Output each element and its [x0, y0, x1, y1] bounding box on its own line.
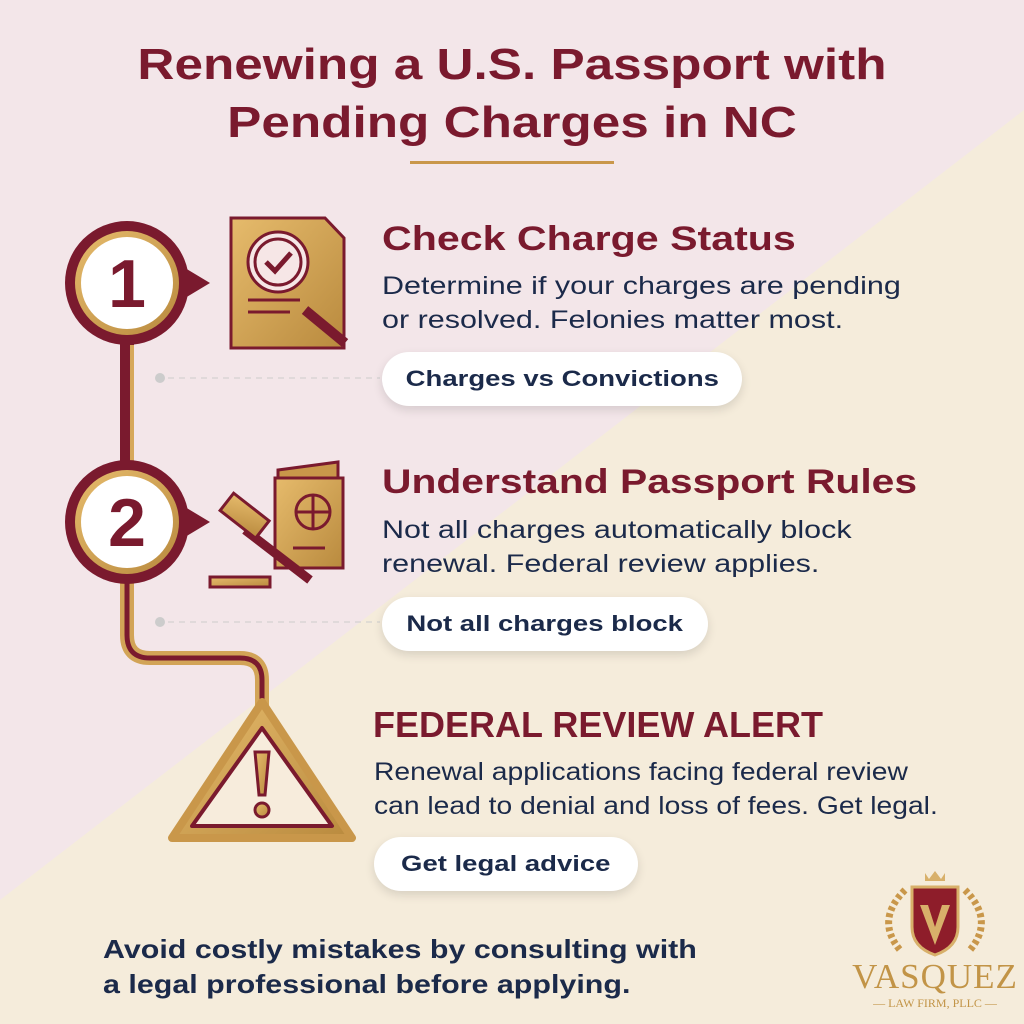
- logo: VASQUEZ: [852, 957, 1018, 996]
- step 2 heading: Understand Passport Rules: [382, 463, 917, 501]
- icon: warning triangle: [172, 702, 352, 838]
- step 2 number: [65, 460, 210, 584]
- step 2 pill: Not all charges block: [407, 611, 683, 636]
- step 1 body: or resolved. Felonies matter most.: [382, 306, 843, 334]
- title: Renewing a U.S. Passport with: [137, 40, 887, 89]
- footer text: [103, 934, 697, 999]
- step 1 pill: [382, 352, 742, 406]
- step 2 pill: [382, 597, 708, 651]
- timeline path and markers: [65, 216, 380, 842]
- step 1 heading: Check Charge Status: [382, 220, 796, 258]
- logo: [852, 871, 1018, 1010]
- footer text: Avoid costly mistakes by consulting with: [103, 934, 697, 964]
- step 1 number: [65, 221, 210, 345]
- step 3 pill: [374, 837, 638, 891]
- step 2 body: renewal. Federal review applies.: [382, 550, 819, 578]
- title: Pending Charges in NC: [227, 98, 797, 147]
- step 3 body: can lead to denial and loss of fees. Get legal.: [374, 792, 938, 820]
- step 2 body: Not all charges automatically block: [382, 516, 852, 544]
- step 3 heading: FEDERAL REVIEW ALERT: [373, 704, 823, 745]
- step 1 pill: Charges vs Convictions: [405, 366, 719, 391]
- icon: document magnifier: [231, 218, 345, 348]
- step 1 body: [382, 272, 901, 334]
- footer text: a legal professional before applying.: [103, 969, 630, 999]
- step 2 body: [382, 516, 852, 578]
- icon: gavel passport: [210, 462, 343, 587]
- step 3 body: [374, 758, 938, 820]
- step 1 body: Determine if your charges are pending: [382, 272, 901, 300]
- logo: — LAW FIRM, PLLC —: [873, 996, 997, 1010]
- step 1 number: 1: [108, 246, 146, 322]
- step 3 pill: Get legal advice: [401, 851, 611, 876]
- title: [137, 40, 887, 147]
- step 2 number: 2: [108, 485, 146, 561]
- step 3 body: Renewal applications facing federal review: [374, 758, 908, 786]
